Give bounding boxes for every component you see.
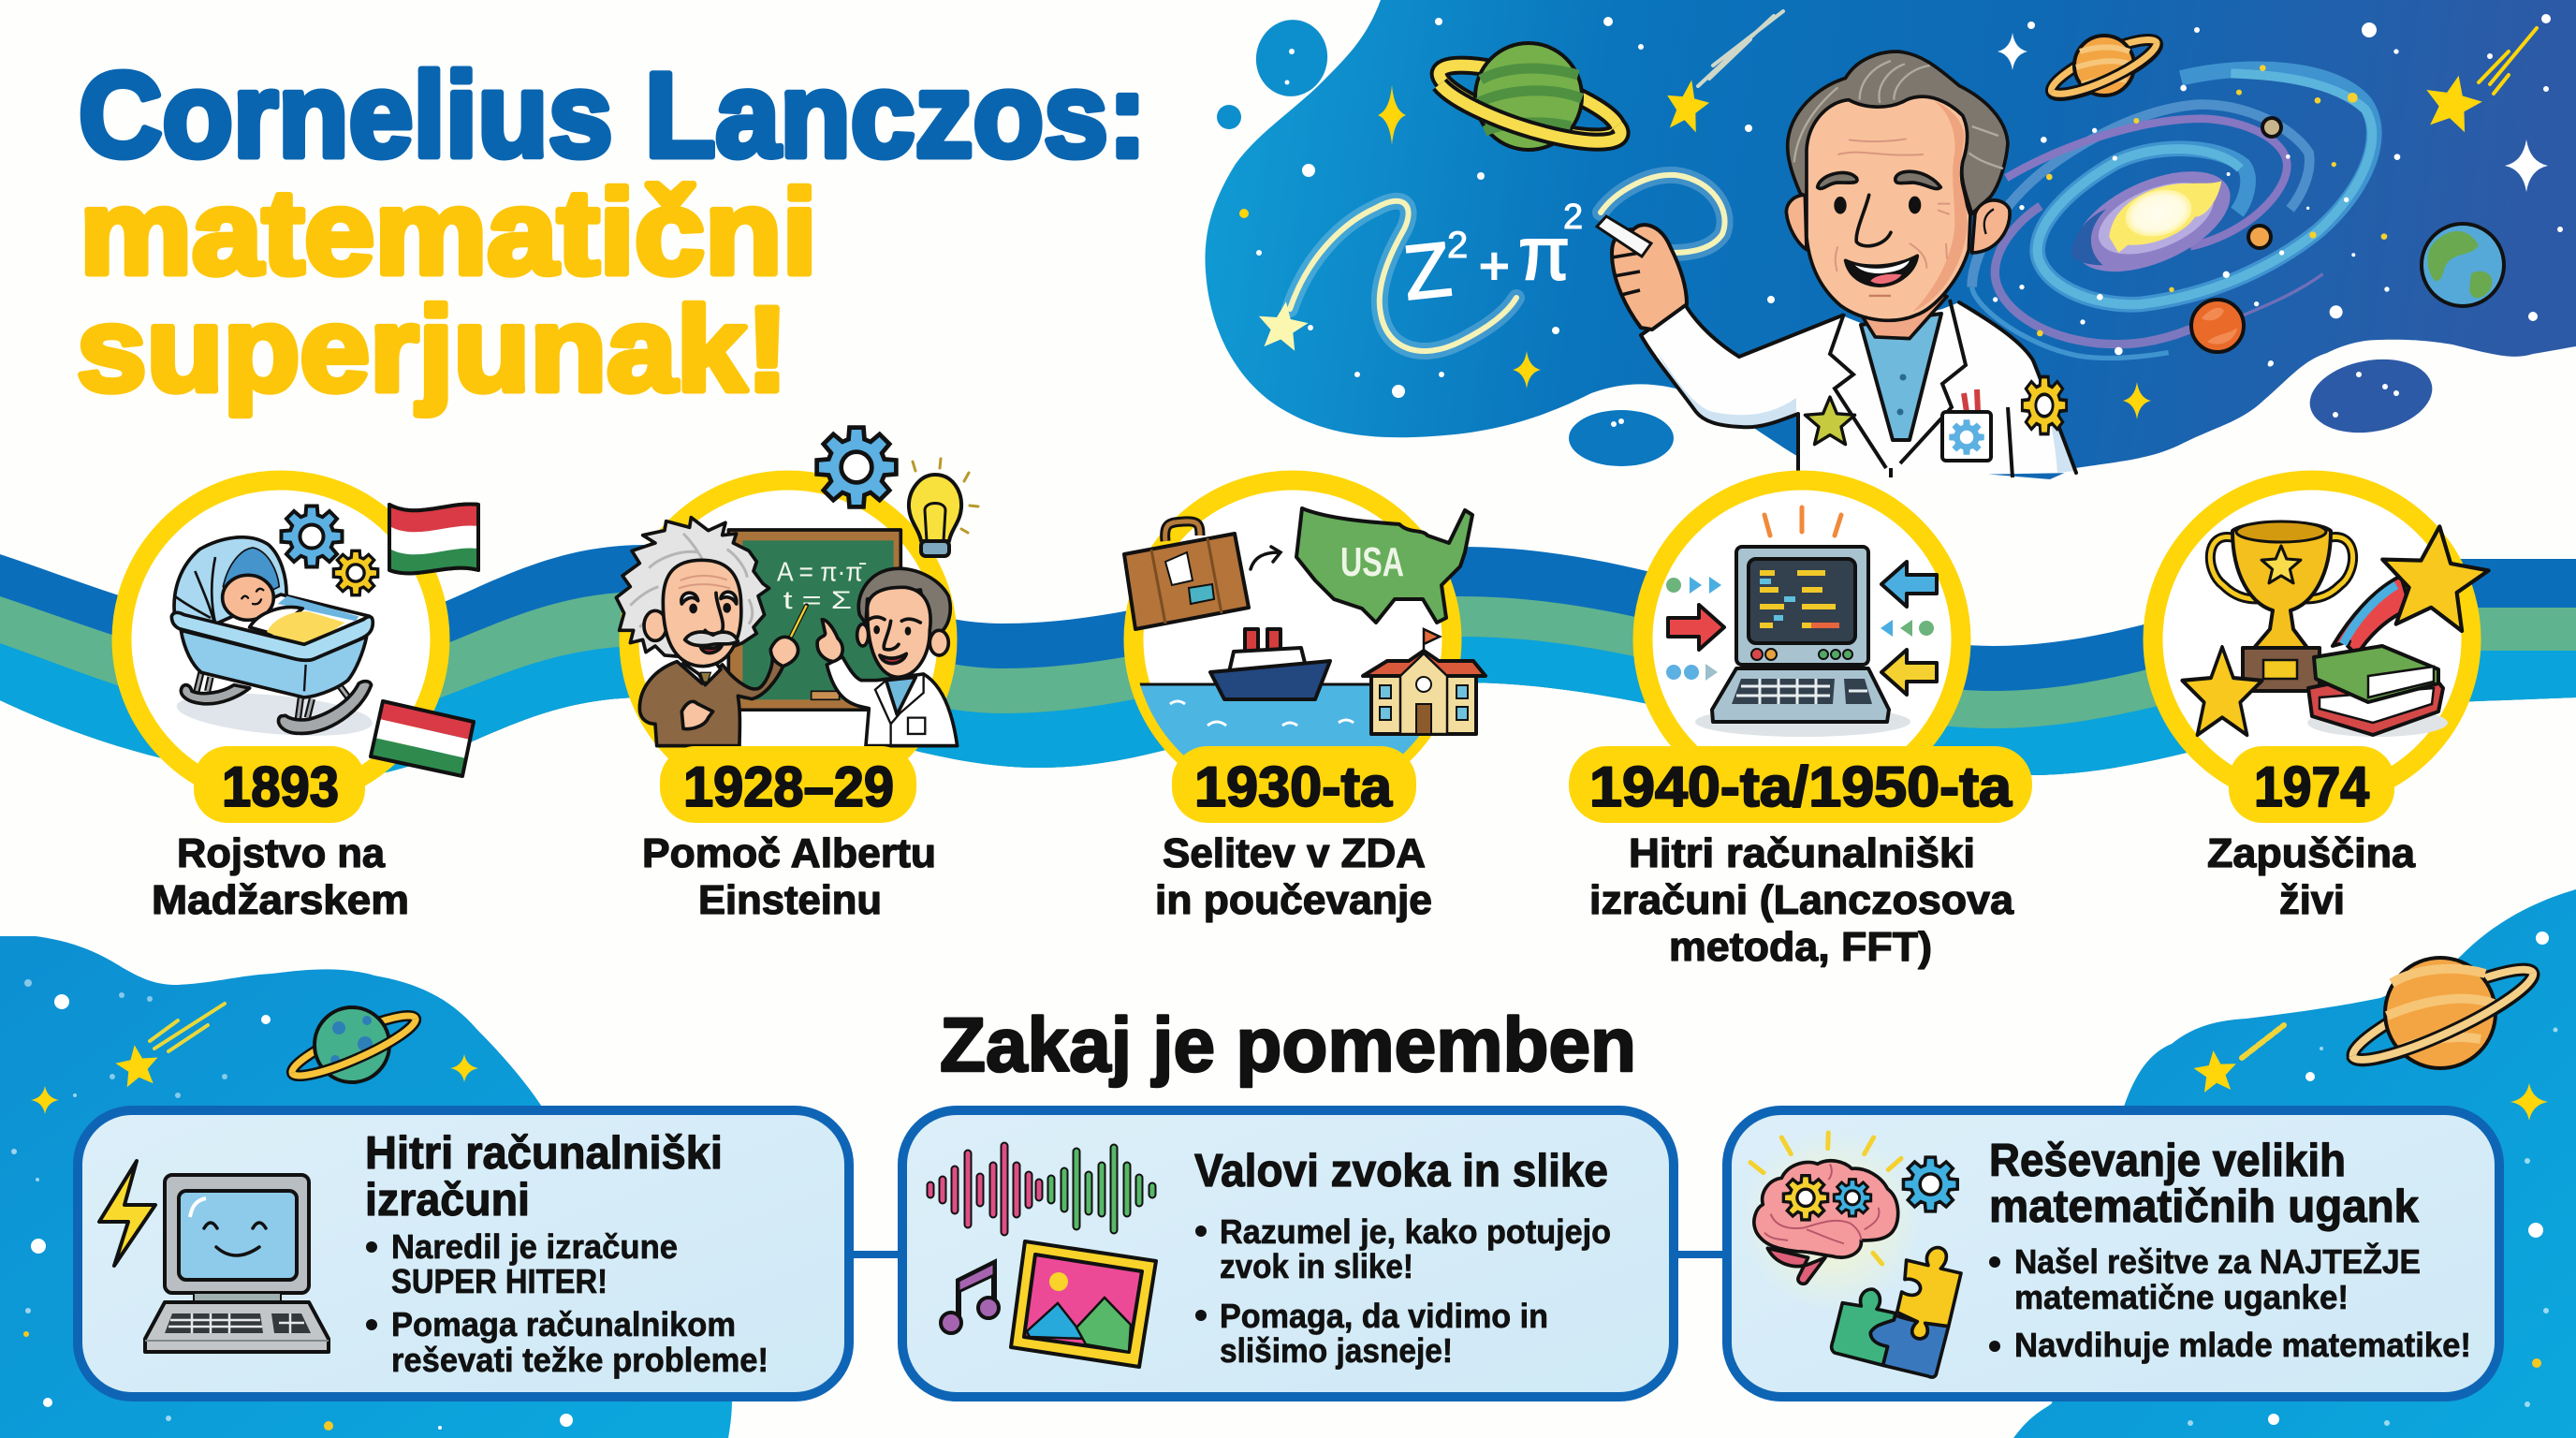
title: matematični: [80, 166, 817, 300]
icon: data arrows: [1668, 562, 1937, 695]
year badge: 1893: [222, 756, 339, 818]
icon: suitcase: [1124, 521, 1249, 629]
label: [1589, 830, 2014, 970]
small floating blobs: [1217, 13, 2438, 466]
label: živi: [2279, 877, 2345, 923]
icon: comet: [2192, 1025, 2284, 1093]
icon: green ringed planet: [1432, 43, 1625, 152]
illustration: brain and puzzle: [1741, 1130, 1961, 1377]
glow: [1741, 1130, 1922, 1311]
sparkles: [31, 1054, 478, 1114]
icon: ringed planet: [287, 1006, 420, 1085]
label: metoda, FFT): [1669, 924, 1932, 970]
badge: star: [1805, 397, 1855, 445]
icon: USA map: [1296, 508, 1472, 623]
year badge: 1928–29: [683, 756, 894, 818]
icon: gear: [817, 428, 896, 506]
stars and dots: [1256, 14, 2563, 427]
sparkle: [2510, 1083, 2548, 1121]
panel: bottom-left space blob: [0, 936, 732, 1438]
year badge: [194, 746, 365, 823]
badge: pocket with gear: [1942, 389, 1991, 461]
chalkboard: [728, 530, 900, 747]
bullet list: Razumel je, kako potujejo: [1220, 1212, 1611, 1251]
icon: waveform: [930, 1146, 1152, 1232]
chalkboard: t = Σ: [783, 586, 852, 614]
head: [1786, 51, 2010, 339]
icon: vintage computer: [1695, 547, 1910, 737]
heading: [365, 1128, 723, 1225]
label: Einsteinu: [698, 877, 882, 923]
icon: trophy: [2210, 521, 2353, 691]
icon: rays: [1764, 507, 1841, 536]
label: in poučevanje: [1155, 877, 1432, 923]
bullet list: slišimo jasneje!: [1220, 1331, 1453, 1370]
hair line highlights: [1794, 61, 2003, 169]
bullet list: Pomaga računalnikom: [391, 1305, 736, 1343]
label: izračuni (Lanczosova: [1589, 877, 2014, 923]
icon: ship: [1210, 629, 1330, 699]
ring: [1134, 480, 1452, 799]
heading: Valovi zvoka in slike: [1194, 1146, 1608, 1196]
icon: lightning bolt: [99, 1161, 155, 1266]
connectors: [847, 1251, 1729, 1258]
label: Hitri računalniški: [1629, 830, 1975, 876]
label: Rojstvo na: [177, 830, 386, 876]
lab coat: [1641, 302, 2076, 477]
bullet list: Naredil je izračune: [391, 1227, 678, 1266]
illustration: Einstein and Lanczos: [616, 518, 958, 747]
heading: [1989, 1136, 2420, 1232]
ring: [1643, 480, 1961, 799]
bullet list: SUPER HITER!: [391, 1262, 607, 1300]
icon: light bulb: [909, 459, 978, 556]
timeline item: 1930-ta: [1123, 480, 1486, 923]
year badge: 1974: [2254, 756, 2370, 818]
bullet list: [1195, 1212, 1611, 1370]
arrow: [1251, 547, 1281, 569]
nose: [1856, 195, 1891, 246]
icon: galaxy: [1972, 49, 2400, 367]
icon: school: [1363, 629, 1486, 734]
bullet list: reševati težke probleme!: [391, 1341, 768, 1379]
timeline item: 1974: [2153, 480, 2493, 923]
year badge: [660, 746, 916, 823]
year badge: 1930-ta: [1194, 756, 1393, 818]
icon: ringed planet: [2345, 956, 2541, 1074]
icon: framed picture: [1011, 1241, 1156, 1367]
rays: [1750, 1133, 1901, 1264]
title: [77, 49, 1147, 417]
label: Madžarskem: [152, 877, 409, 923]
icon: books: [2307, 646, 2448, 737]
bullet list: [1989, 1241, 2471, 1364]
label: [642, 830, 936, 923]
wave ribbon: [0, 545, 2576, 775]
label: [1155, 830, 1432, 923]
timeline item: 1940-ta/1950-ta: [1569, 480, 2032, 970]
icon: orange ringed planet: [2045, 30, 2163, 105]
eyes: [1834, 197, 1847, 214]
gear: [1903, 1157, 1957, 1211]
icon: music note: [941, 1263, 999, 1333]
heading: matematičnih ugank: [1989, 1181, 2420, 1232]
ring: [122, 480, 440, 799]
icon: flag bottom: [371, 701, 474, 776]
icon: smiling computer: [145, 1175, 329, 1352]
formula: π: [1518, 212, 1570, 295]
icon: earth: [2422, 224, 2504, 306]
label: [152, 830, 409, 923]
badge: gear: [2022, 376, 2067, 434]
formula: 2: [1563, 198, 1583, 237]
card: fast computing: [78, 1110, 849, 1397]
ears: [1786, 195, 1807, 250]
shirt: [1861, 314, 1941, 440]
icon: gears: [281, 506, 378, 595]
formula: +: [1479, 236, 1510, 295]
formula: Z: [1399, 227, 1456, 316]
Lanczos: [817, 568, 958, 746]
character: scientist: [1597, 51, 2076, 477]
label: Zapuščina: [2207, 830, 2416, 876]
year badge: 1940-ta/1950-ta: [1589, 756, 2012, 818]
chalk star: [1255, 299, 1310, 352]
section heading: Zakaj je pomemben: [940, 1003, 1636, 1088]
ring: [629, 480, 947, 799]
formula: [1399, 198, 1583, 316]
brows: [1818, 172, 1857, 188]
space background blob: [1205, 0, 2576, 479]
mouth: [1846, 256, 1917, 286]
bullet list: matematične uganke!: [2014, 1278, 2349, 1316]
heading: izračuni: [365, 1175, 530, 1225]
icon: data dots: [1666, 577, 1934, 681]
dots: [2188, 932, 2557, 1426]
puzzle: [1832, 1248, 1961, 1377]
bullet list: Našel rešitve za NAJTEŽJE: [2014, 1241, 2421, 1281]
icon: sea: [1140, 683, 1419, 756]
icon: flag top: [389, 504, 478, 573]
lapels: [1830, 300, 2012, 477]
formula: 2: [1447, 225, 1468, 266]
heading: Hitri računalniški: [365, 1128, 723, 1179]
face: [1807, 96, 1970, 320]
brain: [1754, 1161, 1898, 1284]
title: Cornelius Lanczos:: [79, 49, 1147, 183]
chalk swirl: [1290, 175, 1725, 351]
neck: [1860, 287, 1947, 339]
hand: [1612, 225, 1687, 330]
chalk: [1597, 216, 1651, 257]
bullet list: [366, 1227, 768, 1379]
icon: comet: [113, 1004, 225, 1088]
bullet list: Navdihuje mlade matematike!: [2014, 1326, 2471, 1364]
year badge: [1172, 746, 1416, 823]
label: [2207, 830, 2416, 923]
card: sound and image waves: [902, 1110, 1674, 1397]
icon: star: [2182, 647, 2262, 735]
dots: [11, 979, 573, 1431]
panel: bottom-right space blob: [2013, 889, 2576, 1438]
ring: [2153, 480, 2471, 799]
label: Selitev v ZDA: [1163, 830, 1426, 876]
timeline item: 1893: [122, 480, 478, 923]
bullet list: Pomaga, da vidimo in: [1220, 1297, 1548, 1335]
icon: USA map: USA: [1340, 539, 1404, 585]
icon: baby cradle: [171, 537, 374, 742]
card: big math puzzles: [1727, 1110, 2499, 1397]
chalkboard: A = π·π̄: [777, 558, 866, 588]
hair: [1788, 51, 2008, 213]
comet trails: [1698, 11, 2537, 94]
title: superjunak!: [77, 283, 788, 417]
icon: small planets: [2191, 118, 2281, 352]
Einstein: [616, 518, 807, 746]
panel: top space scene: [1205, 0, 2576, 479]
label: Pomoč Albertu: [642, 830, 936, 876]
icon: shooting star: [2333, 521, 2493, 655]
heading: Reševanje velikih: [1989, 1136, 2346, 1186]
year badge: [2229, 746, 2394, 823]
timeline item: 1928–29: [616, 428, 978, 923]
bullet list: zvok in slike!: [1220, 1247, 1413, 1285]
